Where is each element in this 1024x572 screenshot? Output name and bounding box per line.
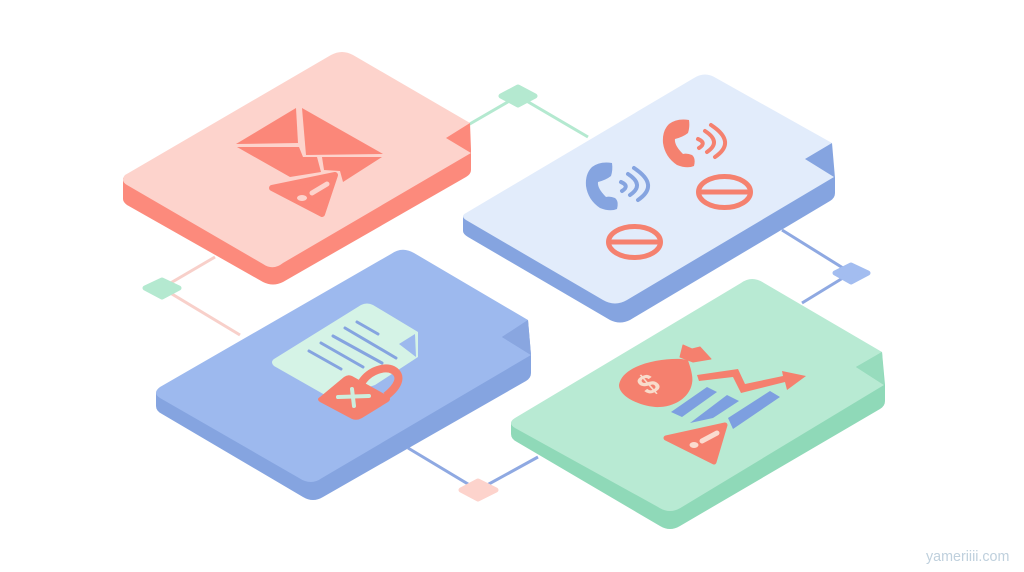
icon: envelope [236, 108, 383, 182]
connector: salmon line and green node between red and blue cards [145, 257, 240, 335]
icon: blocked sign lower [608, 226, 660, 258]
watermark: yameriiii.com [926, 549, 1009, 565]
icon: warning triangle [666, 425, 725, 462]
icon: blocked sign upper [698, 176, 750, 208]
icon: money bag [619, 345, 711, 407]
icon: red phone with signal [663, 120, 725, 167]
icon: padlock with cross [318, 368, 398, 420]
icon: blue phone with signal [586, 162, 648, 210]
icon: money bag: $ [631, 368, 667, 401]
connector: blue line and salmon node between blue and green cards [408, 448, 538, 499]
connector: green line and node between red and light blue cards [468, 87, 588, 137]
connector: blue line and node between light blue and green cards [782, 230, 868, 303]
icon: warning triangle [272, 175, 335, 214]
icon: bars [671, 387, 780, 429]
panel: red email card [123, 52, 471, 284]
icon: trend arrow [697, 369, 806, 393]
icon: document [272, 304, 418, 395]
panel: green finance card [511, 279, 885, 529]
panel: light blue phone card [463, 74, 835, 322]
panel: blue document card [156, 250, 531, 500]
